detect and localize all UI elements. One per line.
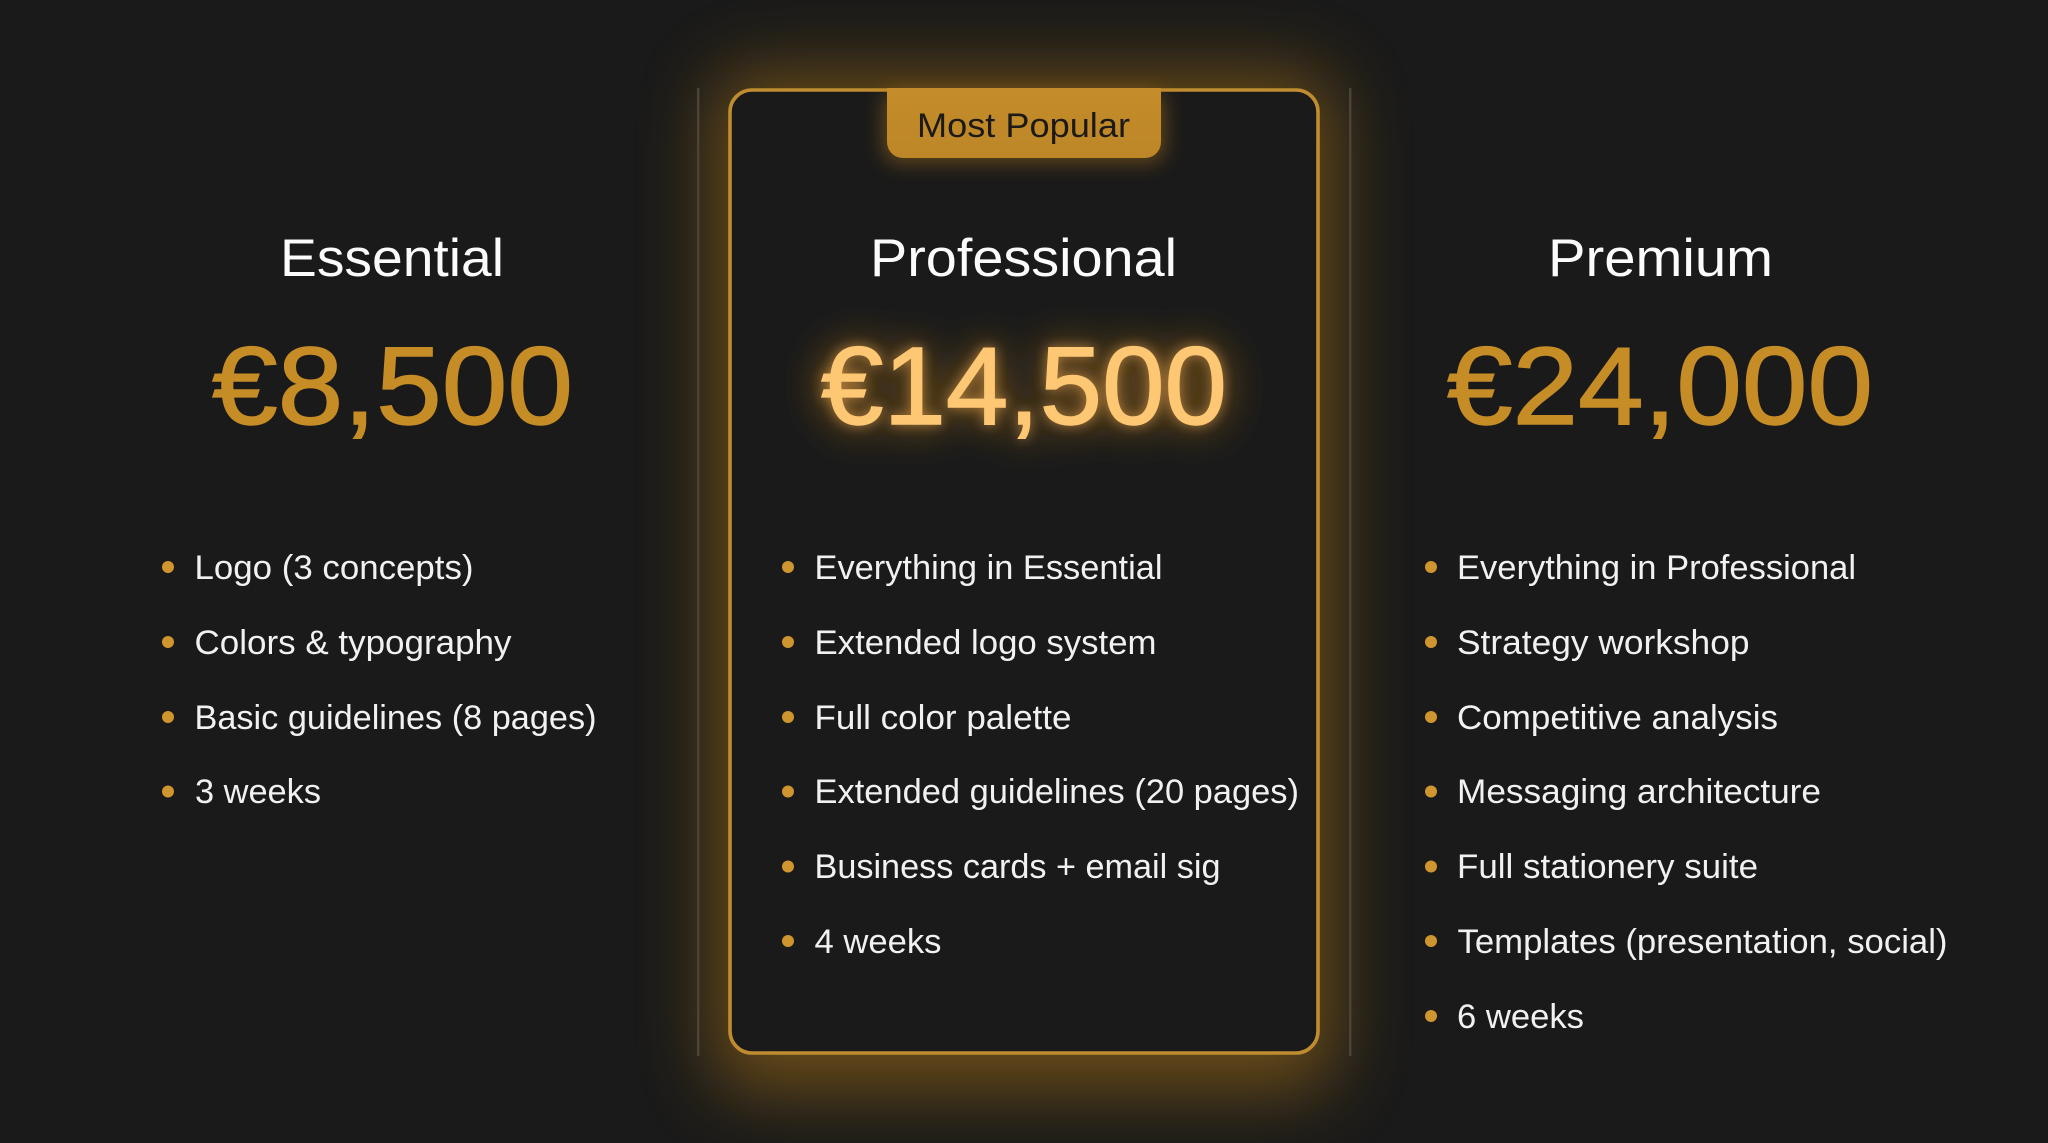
list item: Everything in Professional <box>1457 549 1856 587</box>
card outline <box>730 90 1318 1053</box>
list item: 4 weeks <box>814 923 942 961</box>
list item: Strategy workshop <box>1457 624 1750 662</box>
list item: Full stationery suite <box>1457 848 1758 886</box>
list item: 3 weeks <box>195 773 321 811</box>
list item: Everything in Essential <box>814 549 1162 587</box>
heading: Premium: Premium <box>1548 229 1773 288</box>
list item: Basic guidelines (8 pages) <box>194 699 596 737</box>
panel: Premium <box>1425 229 1948 1036</box>
list item: 6 weeks <box>1457 998 1584 1036</box>
price: 24,000: €24,000 <box>1447 325 1873 448</box>
card outer glow <box>712 72 1336 1092</box>
feature list: Professional <box>782 549 1299 961</box>
badge: Most Popular <box>887 88 1161 158</box>
list item: Full color palette <box>814 699 1072 737</box>
list item: Logo (3 concepts) <box>194 549 474 587</box>
list item: Extended logo system <box>814 624 1156 662</box>
list item: Competitive analysis <box>1457 699 1778 737</box>
badge glow <box>884 92 1164 162</box>
heading: Professional: Professional <box>870 229 1177 288</box>
list item: Messaging architecture <box>1457 773 1821 811</box>
price: 8,500: €8,500 <box>212 325 573 448</box>
list item: Business cards + email sig <box>814 848 1220 886</box>
list item: Extended guidelines (20 pages) <box>814 773 1299 811</box>
list item: Colors & typography <box>194 624 512 662</box>
feature list: Premium <box>1425 549 1948 1036</box>
divider: right <box>1349 88 1351 1056</box>
list item: Templates (presentation, social) <box>1458 923 1948 961</box>
heading: Essential: Essential <box>280 229 504 288</box>
panel: Professional <box>730 88 1318 1053</box>
feature list: Essential <box>162 549 596 811</box>
badge: Most Popular: Most Popular <box>917 107 1130 145</box>
panel: Essential <box>162 229 596 811</box>
divider: left <box>697 88 699 1056</box>
price: 14,500: €14,500 <box>821 325 1227 448</box>
